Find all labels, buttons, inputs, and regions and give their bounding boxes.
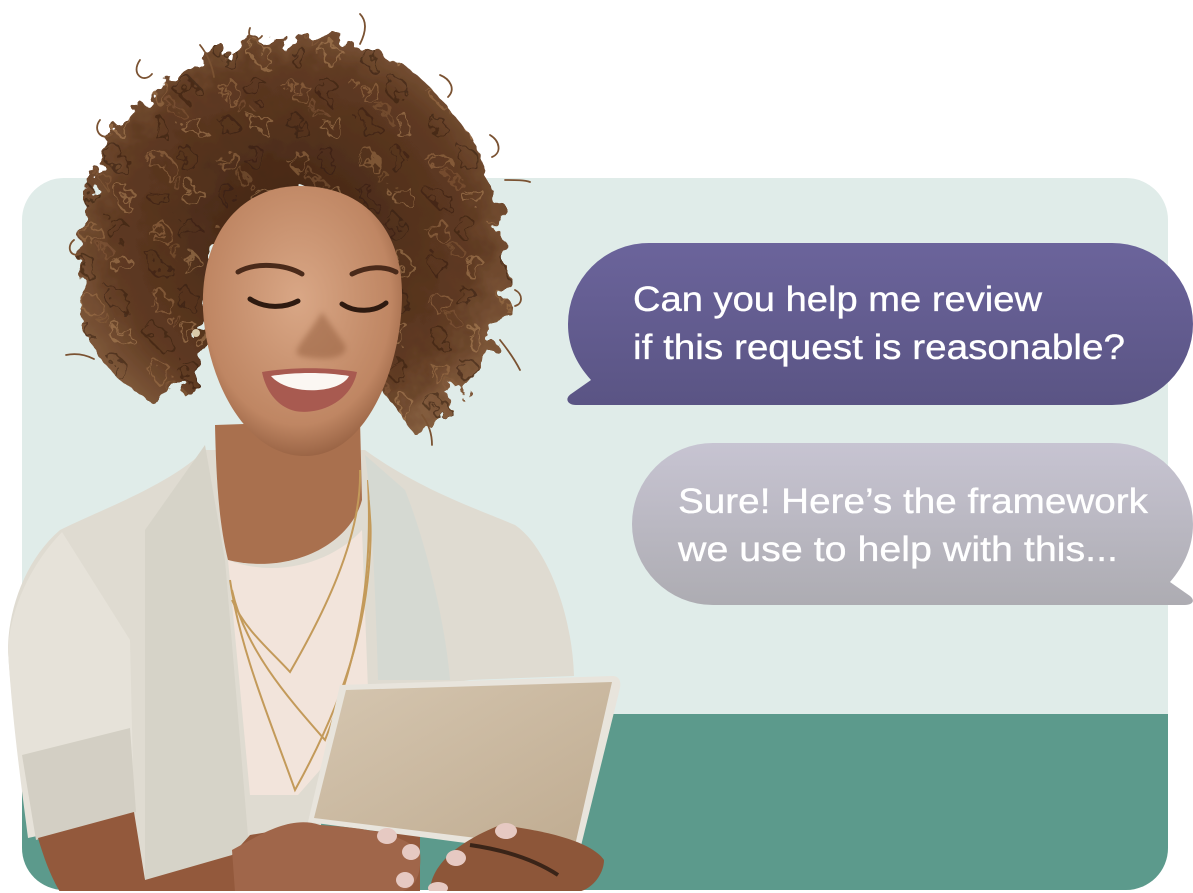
speech bubble: answer: we use to help with this... [677,530,1118,569]
forearm left [38,812,420,892]
eyebrows [238,265,396,274]
nose [297,312,346,359]
hands [232,822,604,893]
hair [66,14,530,445]
background panel [22,178,1168,890]
neck [215,420,362,564]
sleeve cuff [22,728,136,840]
left sleeve shading [8,654,36,838]
shirt [228,530,368,795]
face [203,186,402,456]
teeth [271,373,349,390]
cardigan front panel [145,445,250,880]
mouth [262,368,357,412]
cardigan body [8,450,574,885]
speech bubble: question: if this request is reasonable? [633,328,1125,367]
speech bubble: question [567,243,1193,405]
speech bubble: question: Can you help me review [633,280,1043,319]
cardigan right panel [365,455,450,680]
eyes [250,299,386,310]
tablet [308,676,620,858]
speech bubble: answer: Sure! Here’s the framework [678,482,1149,521]
woman illustration [8,14,620,893]
speech bubble: answer [632,443,1193,605]
earring [192,329,200,337]
necklace [230,470,371,790]
